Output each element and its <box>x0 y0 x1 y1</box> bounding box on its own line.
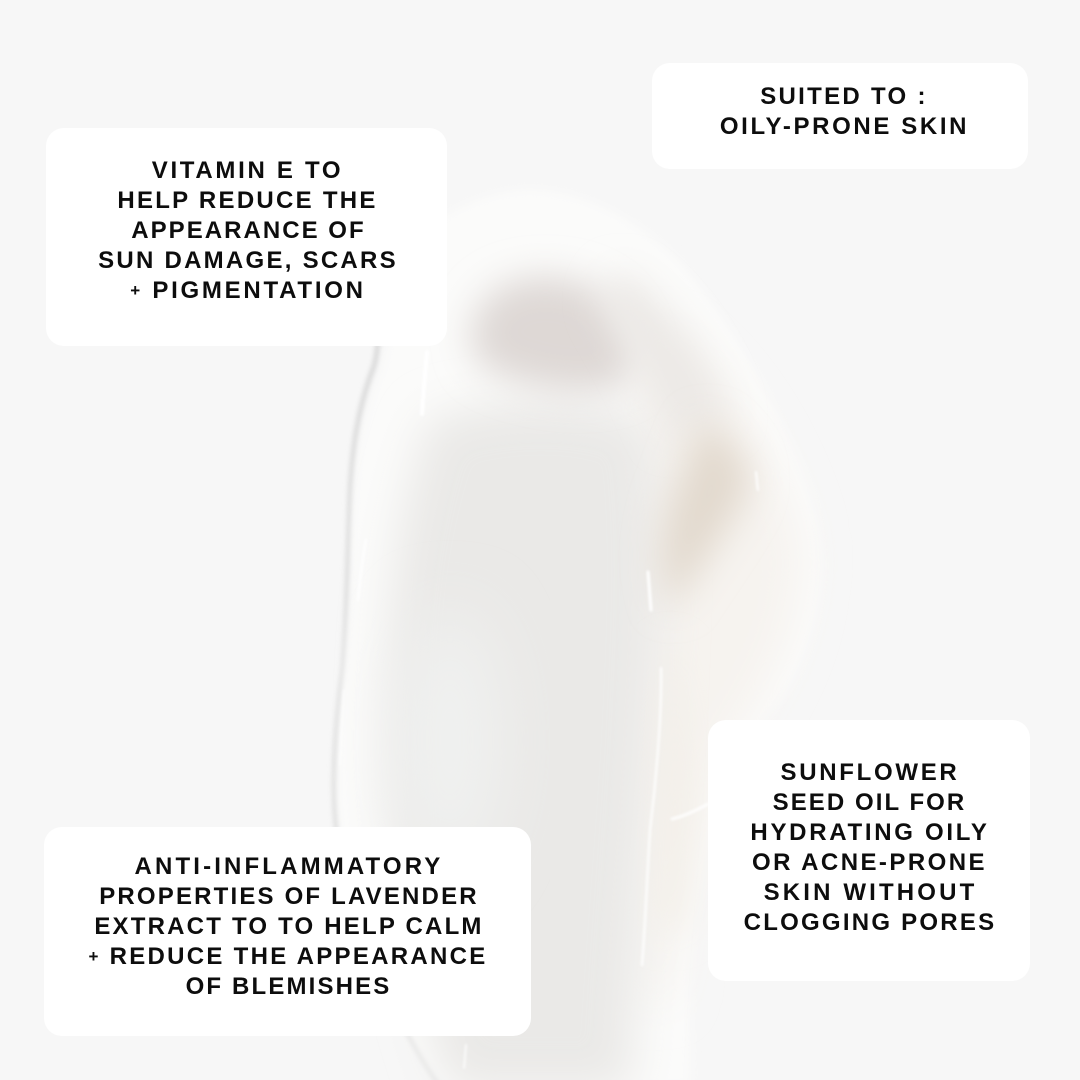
beige fold <box>662 420 750 610</box>
card: vitamin E: APPEARANCE OF <box>131 217 366 244</box>
card: sunflower seed oil: SUNFLOWER <box>781 759 959 786</box>
left edge shadow <box>335 225 440 1080</box>
lighter lower body <box>400 610 500 870</box>
card: sunflower seed oil: SKIN WITHOUT <box>764 879 977 906</box>
card: sunflower seed oil <box>708 720 1030 981</box>
card: sunflower seed oil: SEED OIL FOR <box>773 789 966 816</box>
card: lavender extract: ANTI-INFLAMMATORY <box>135 853 443 880</box>
cream body <box>337 190 821 1080</box>
card: sunflower seed oil: OR ACNE-PRONE <box>752 849 987 876</box>
card: sunflower seed oil: HYDRATING OILY <box>750 819 990 846</box>
card: vitamin E: SUN DAMAGE, SCARS <box>98 247 398 274</box>
top shoulder tint <box>600 270 730 440</box>
grey core of swatch <box>385 402 660 1080</box>
highlights <box>340 352 758 1068</box>
warm lower fold <box>655 640 691 930</box>
card: suited to: OILY-PRONE SKIN <box>720 113 969 140</box>
card: suited to <box>652 63 1028 169</box>
card: vitamin E <box>46 128 447 346</box>
card: vitamin E: + PIGMENTATION <box>130 277 366 304</box>
card: vitamin E: HELP REDUCE THE <box>117 187 378 214</box>
card: vitamin E: VITAMIN E TO <box>152 157 343 184</box>
card: lavender extract: + REDUCE THE APPEARANCE <box>88 943 488 970</box>
top mauve shadow <box>471 277 638 391</box>
card: lavender extract: EXTRACT TO TO HELP CALM <box>94 913 484 940</box>
soft right lobe tint <box>640 330 801 1000</box>
card: lavender extract: OF BLEMISHES <box>186 973 391 1000</box>
card: lavender extract <box>44 827 531 1036</box>
card: sunflower seed oil: CLOGGING PORES <box>744 909 996 936</box>
card: lavender extract: PROPERTIES OF LAVENDER <box>99 883 479 910</box>
card: suited to: SUITED TO : <box>760 83 928 110</box>
